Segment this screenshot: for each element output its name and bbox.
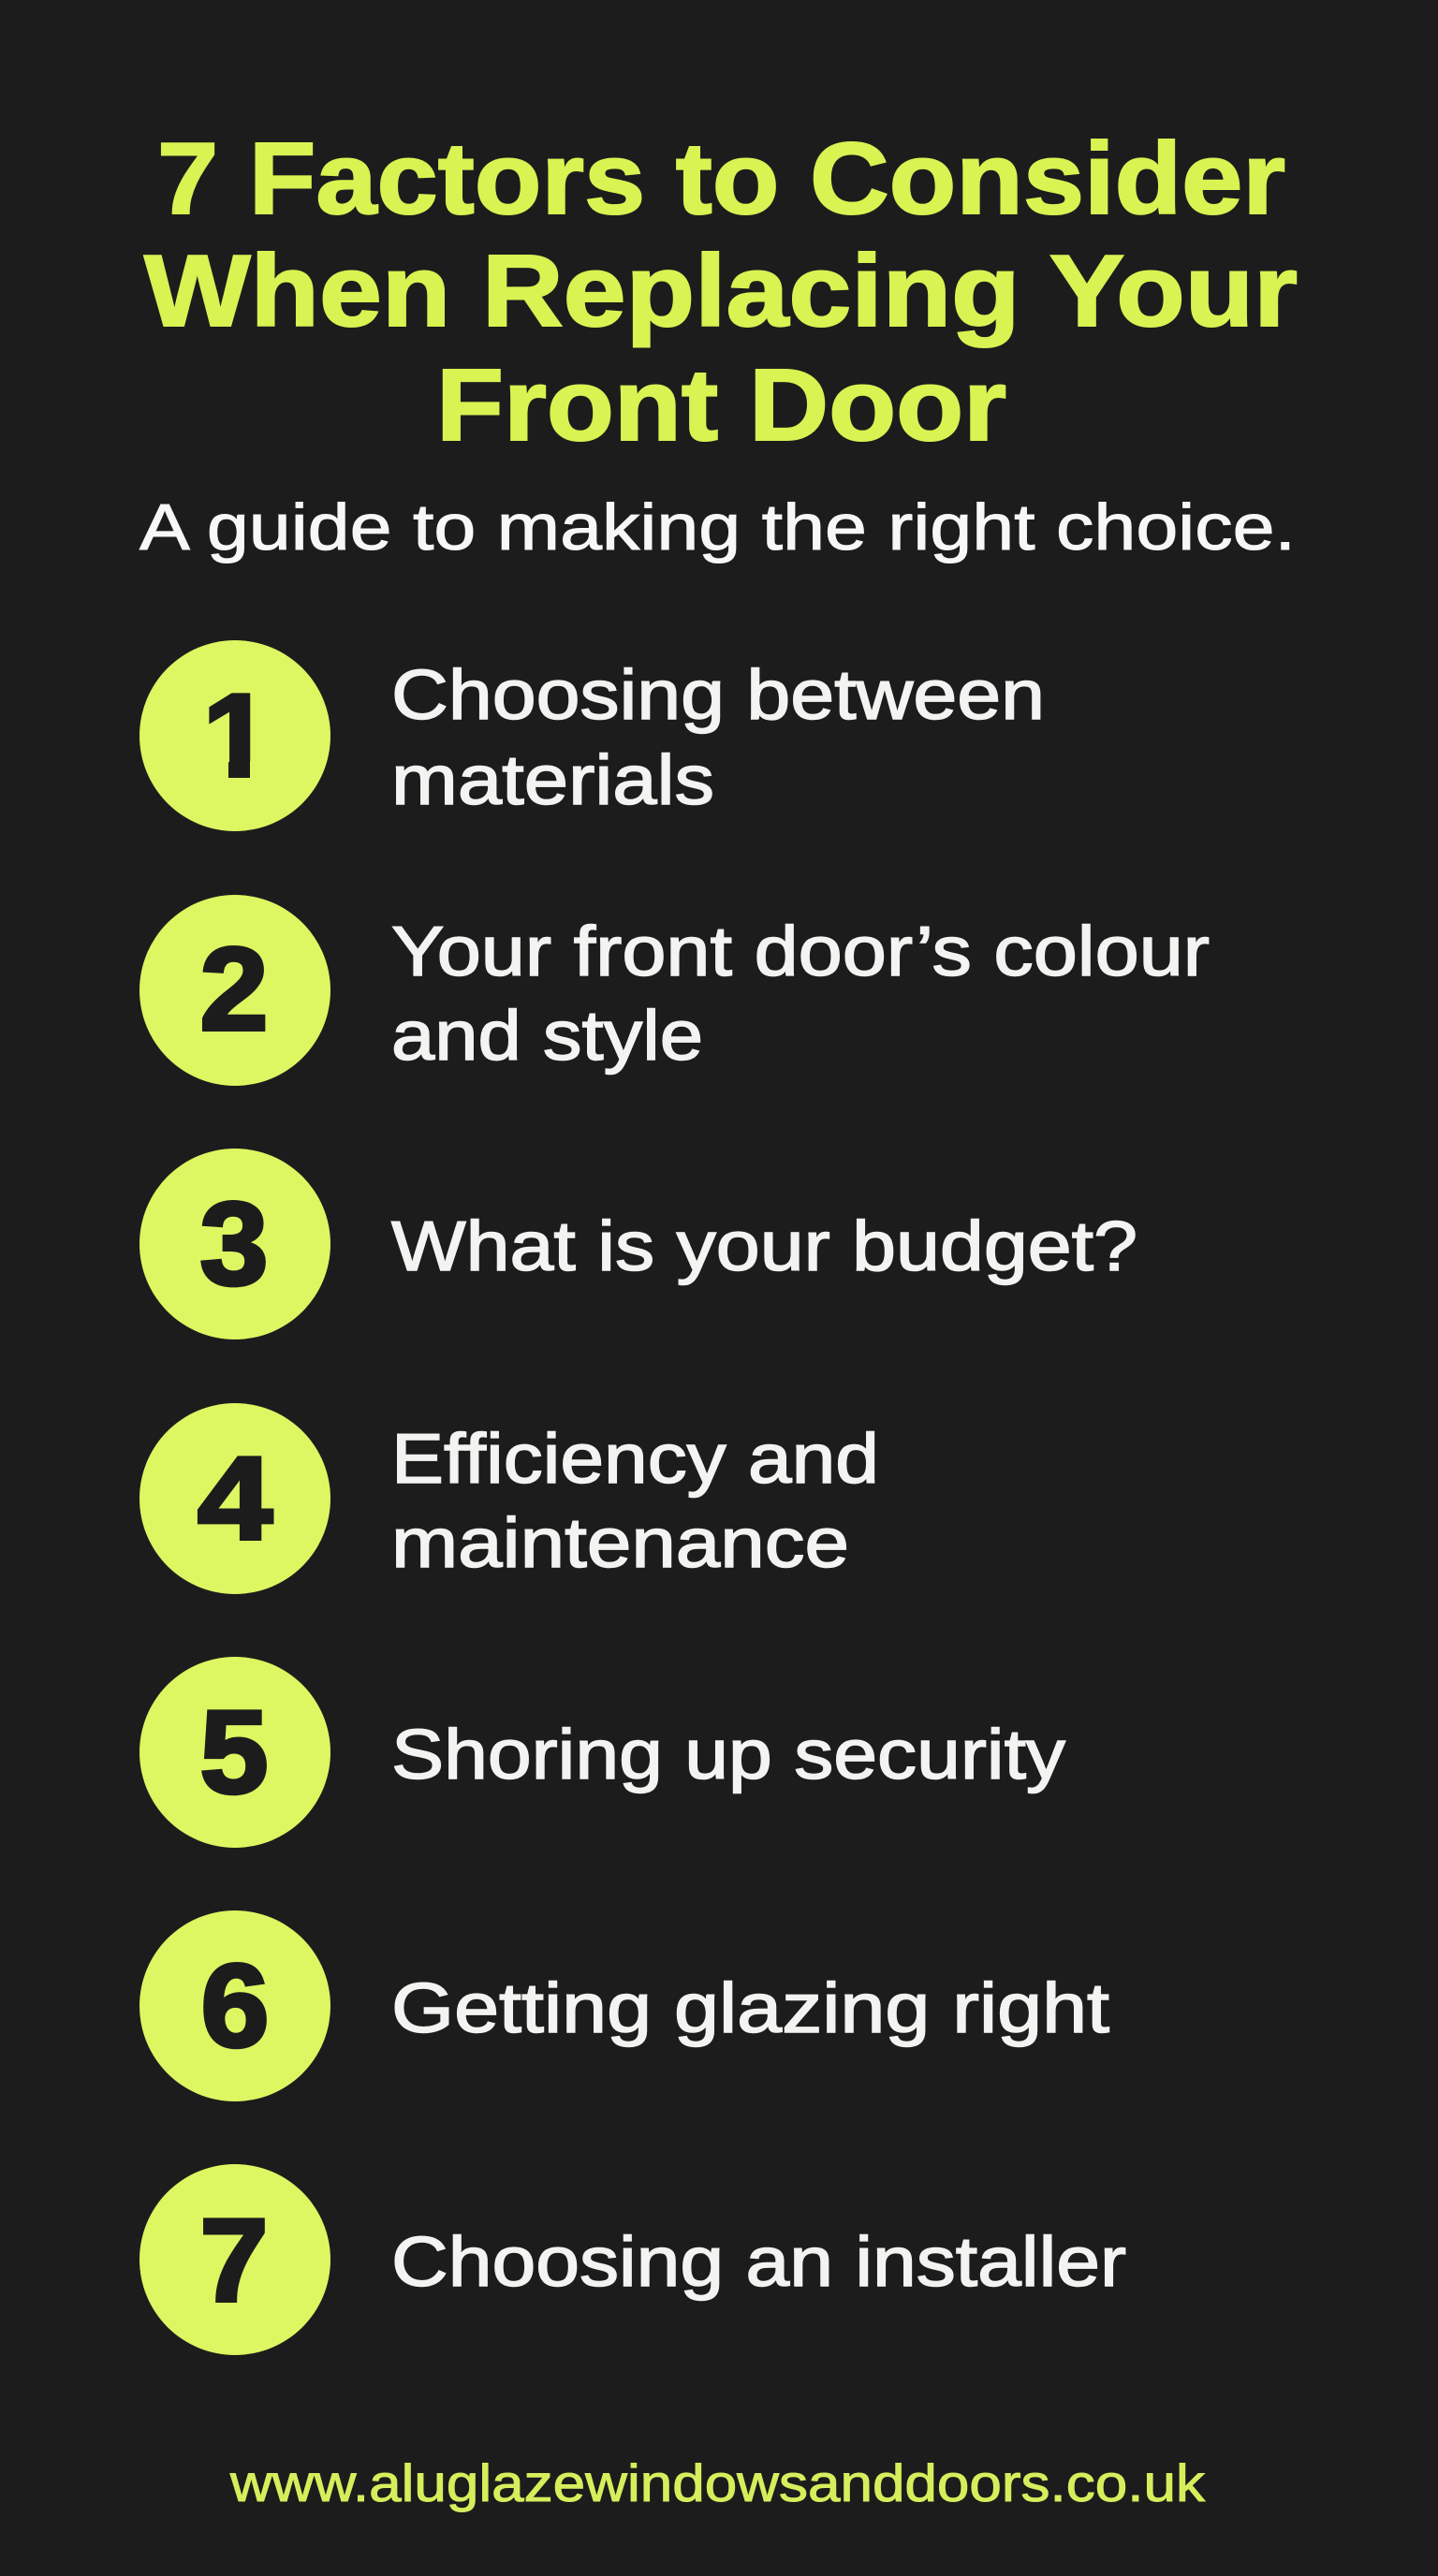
title: [144, 122, 1298, 462]
number badge 3: [139, 1149, 330, 1339]
number badge 4: [139, 1403, 330, 1594]
title: 7 Factors to Consider: [157, 122, 1285, 236]
number badge 3: 3: [200, 1178, 268, 1310]
factor 7: installer: [139, 2164, 1126, 2355]
factor 4 label: Efficiency and: [391, 1419, 879, 1498]
number badge 7: 7: [200, 2194, 268, 2326]
factor 2 label: [391, 912, 1210, 1075]
factor 2 label: and style: [391, 996, 703, 1075]
factor 3 label: What is your budget?: [391, 1207, 1137, 1285]
number badge 6: [139, 1910, 330, 2101]
factor 6 label: Getting glazing right: [391, 1969, 1109, 2047]
factor 1 label: materials: [391, 740, 714, 819]
title: Front Door: [436, 348, 1006, 462]
number badge 5: [139, 1657, 330, 1848]
factor 5 label: Shoring up security: [391, 1715, 1066, 1793]
number badge 6: 6: [200, 1939, 270, 2071]
factor 4 label: [391, 1419, 879, 1582]
number badge 5: 5: [200, 1686, 268, 1818]
factor 4 label: maintenance: [391, 1503, 849, 1582]
factor 1 label: Choosing between: [391, 655, 1045, 734]
factor 4: efficiency and maintenance: [139, 1403, 879, 1594]
factor 2: colour and style: [139, 895, 1210, 1086]
factor 1: choosing between materials: [139, 640, 1045, 831]
website url: www.aluglazewindowsanddoors.co.uk: [229, 2453, 1206, 2512]
factor 6: glazing: [139, 1910, 1109, 2101]
factor 3: budget: [139, 1149, 1137, 1339]
factor 1 label: [391, 655, 1045, 819]
title: When Replacing Your: [144, 234, 1298, 348]
factor 7 label: Choosing an installer: [391, 2222, 1126, 2301]
number badge 1: [139, 640, 330, 831]
factor 5: security: [139, 1657, 1066, 1848]
subtitle: A guide to making the right choice.: [139, 490, 1296, 564]
number badge 2: 2: [200, 923, 268, 1055]
factor 2 label: Your front door’s colour: [391, 912, 1210, 990]
number badge 1: 1: [202, 669, 271, 801]
number badge 7: [139, 2164, 330, 2355]
number badge 4: 4: [198, 1432, 272, 1564]
number badge 2: [139, 895, 330, 1086]
